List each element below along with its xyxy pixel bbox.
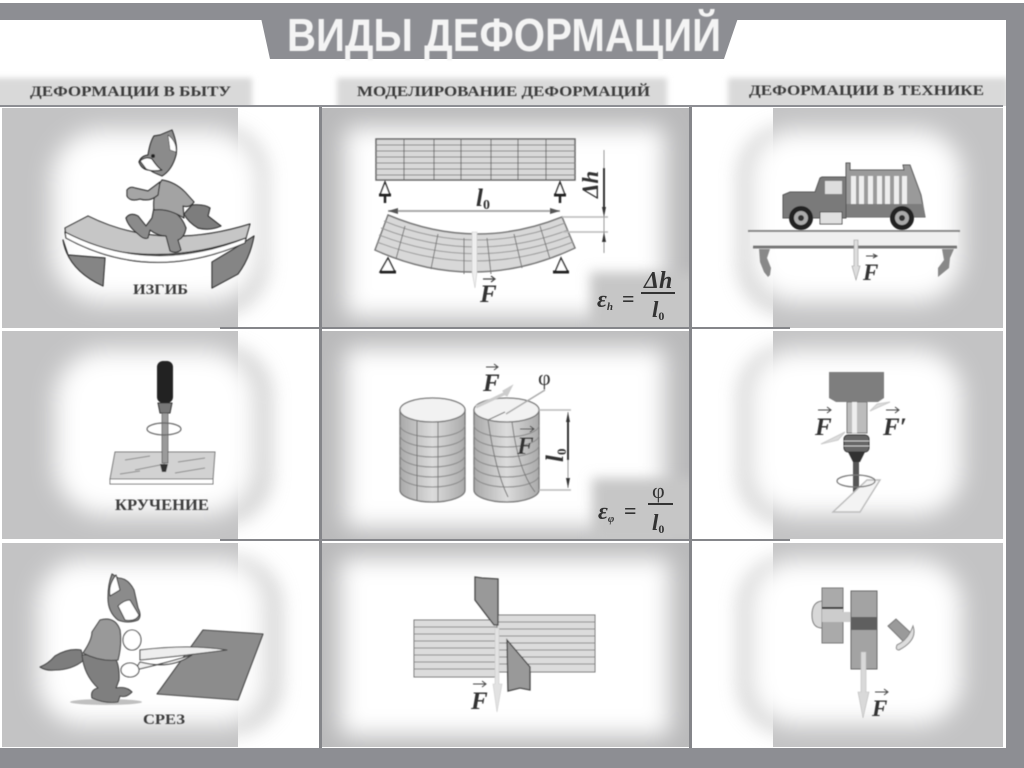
arrow: upper force vector mark: [486, 364, 498, 370]
arrow: force vector mark: [875, 689, 888, 695]
title text: ВИДЫ ДЕФОРМАЦИЙ: [287, 9, 721, 61]
label: bending: ИЗГИБ: [133, 282, 188, 298]
label: force F: F: [862, 260, 878, 285]
title banner: [261, 9, 738, 61]
icon: fox cutting with scissors: [40, 574, 263, 705]
icon: riveted plates: [812, 588, 914, 721]
formula box: bending strain: l: [652, 297, 658, 322]
label: force F prime: F′: [882, 414, 907, 441]
header: everyday deformations: ДЕФОРМАЦИИ В БЫТУ: [30, 84, 231, 100]
label: torsion: КРУЧЕНИЕ: [115, 497, 209, 514]
label: length l0: 0: [554, 449, 569, 455]
diagram: beam under bending: [375, 139, 608, 308]
formula box: bending strain: Δh: [643, 268, 672, 294]
formula box: torsion strain: =: [624, 498, 637, 523]
label: length l0: l: [476, 185, 483, 212]
label: force F: F: [871, 696, 887, 721]
panel: bending model: [322, 108, 700, 338]
arrow: force F vector mark: [818, 407, 831, 413]
icon: screwdriver in board: [110, 361, 215, 484]
label: phi: φ: [538, 365, 551, 390]
header: modelling deformations: МОДЕЛИРОВАНИЕ ДЕФОРМАЦИЙ: [357, 83, 651, 100]
panel: shear in engineering: [738, 543, 1003, 747]
formula box: torsion strain: φ: [652, 478, 665, 503]
panel: bending in engineering: [738, 108, 1003, 328]
panel: torsion model: [322, 331, 702, 544]
formula box: torsion strain: φ: [608, 513, 615, 525]
formula box: torsion strain: l: [652, 510, 658, 535]
label: force F: F: [479, 281, 497, 308]
formula box: bending strain: h: [607, 301, 613, 313]
icon: fox walking on bent board: [63, 130, 254, 288]
formula box: bending strain: [584, 266, 689, 327]
label: length l0: l: [542, 455, 569, 462]
arrow: force vector mark: [483, 276, 495, 282]
diagram: twisted cylinders: [400, 364, 571, 502]
formula box: torsion strain: ε: [598, 499, 608, 525]
formula box: torsion strain: 0: [658, 522, 664, 536]
formula box: torsion strain: [592, 478, 702, 544]
panel: shear, everyday: [2, 543, 282, 747]
header: deformations in engineering: ДЕФОРМАЦИИ В ТЕХНИКЕ: [749, 83, 984, 99]
label: force F: F: [814, 414, 832, 441]
label: shear: СРЕЗ: [143, 712, 185, 728]
icon: truck on a bridge beam: [748, 163, 960, 285]
arrow: force vector mark: [473, 681, 486, 687]
panel: torsion, everyday: [2, 331, 272, 539]
formula box: bending strain: 0: [658, 309, 664, 323]
label: delta h: Δh: [578, 171, 603, 199]
icon: drill chuck: [814, 372, 907, 512]
panel: torsion in engineering: [738, 331, 1003, 539]
arrow: force F prime vector mark: [886, 407, 899, 413]
panel: shear model: [322, 543, 689, 747]
formula box: bending strain: =: [622, 286, 635, 311]
arrow: lower force vector mark: [520, 426, 534, 432]
grid lines: [220, 107, 790, 748]
label: length l0: 0: [483, 198, 490, 213]
panel: bending, everyday: [2, 108, 268, 328]
label: force F upper: F: [482, 370, 500, 397]
label: force F: F: [470, 688, 488, 715]
column headers: [0, 76, 1006, 107]
label: force F lower: F: [516, 433, 534, 460]
diagram: plate between blades: [414, 577, 595, 715]
formula box: bending strain: ε: [597, 287, 607, 313]
arrow: force vector mark: [866, 254, 877, 258]
